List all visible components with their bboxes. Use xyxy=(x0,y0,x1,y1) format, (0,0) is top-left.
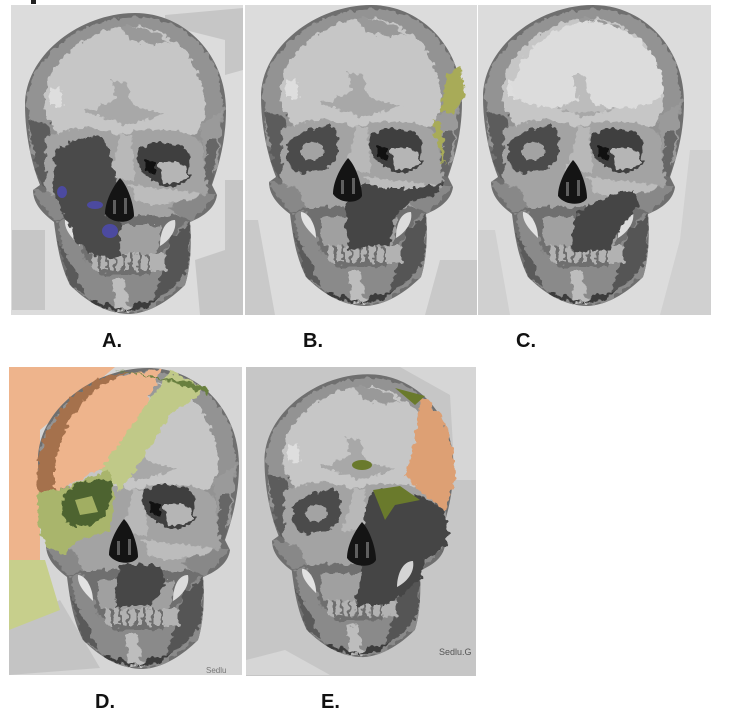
label A: A. xyxy=(102,330,122,352)
right orbit D cover and orbits xyxy=(59,482,196,529)
panel A: skull with left mid-face shaded xyxy=(11,5,243,315)
orange temple xyxy=(405,395,455,510)
nose E xyxy=(347,522,376,566)
skull B xyxy=(261,5,462,306)
nose B xyxy=(333,158,362,202)
label B: B. xyxy=(303,330,323,352)
skull A xyxy=(25,13,226,314)
panel D background xyxy=(9,367,242,675)
dark shaded region xyxy=(345,180,445,250)
orange and green background zones xyxy=(9,367,115,630)
olive patches on temple xyxy=(432,65,465,165)
panel B background xyxy=(245,5,477,315)
label E: E. xyxy=(321,691,340,713)
credit mark: Sedlu.G xyxy=(439,647,472,657)
panel E background xyxy=(246,367,476,676)
lighter forehead xyxy=(512,22,664,112)
dark shaded region xyxy=(570,190,640,252)
orange zone over cranium xyxy=(37,370,160,490)
label C: C. xyxy=(516,330,536,352)
green orbit area xyxy=(38,470,115,555)
dark shaded region xyxy=(355,490,448,605)
brow detail xyxy=(560,75,610,113)
panel A background xyxy=(11,5,243,315)
label D: D. xyxy=(95,691,115,713)
nose C xyxy=(558,160,587,204)
skull C xyxy=(483,5,684,306)
green zone over cranium xyxy=(100,372,208,490)
panel E: skull with right half shaded and orange temple xyxy=(246,367,476,676)
panel C background xyxy=(478,5,711,315)
credit mark D: Sedlu xyxy=(206,666,226,675)
orbits C xyxy=(507,126,644,173)
dark shaded region xyxy=(53,136,121,258)
panel C: skull with small maxilla shading xyxy=(478,5,711,315)
orbits E xyxy=(292,490,420,534)
panel D: tilted skull with orange and green zones xyxy=(9,367,242,675)
stray mark at top edge xyxy=(31,0,36,4)
right jaw gap E xyxy=(397,561,413,587)
skull E xyxy=(264,374,453,657)
panel B: skull with right maxilla shaded xyxy=(245,5,477,315)
orbits B xyxy=(286,126,423,173)
dark maxilla xyxy=(115,565,165,607)
green patches xyxy=(352,388,425,520)
blue spots xyxy=(57,186,118,238)
orbits A xyxy=(54,140,191,187)
nose D xyxy=(109,519,138,563)
nose A xyxy=(105,178,134,222)
skull D xyxy=(38,368,239,669)
